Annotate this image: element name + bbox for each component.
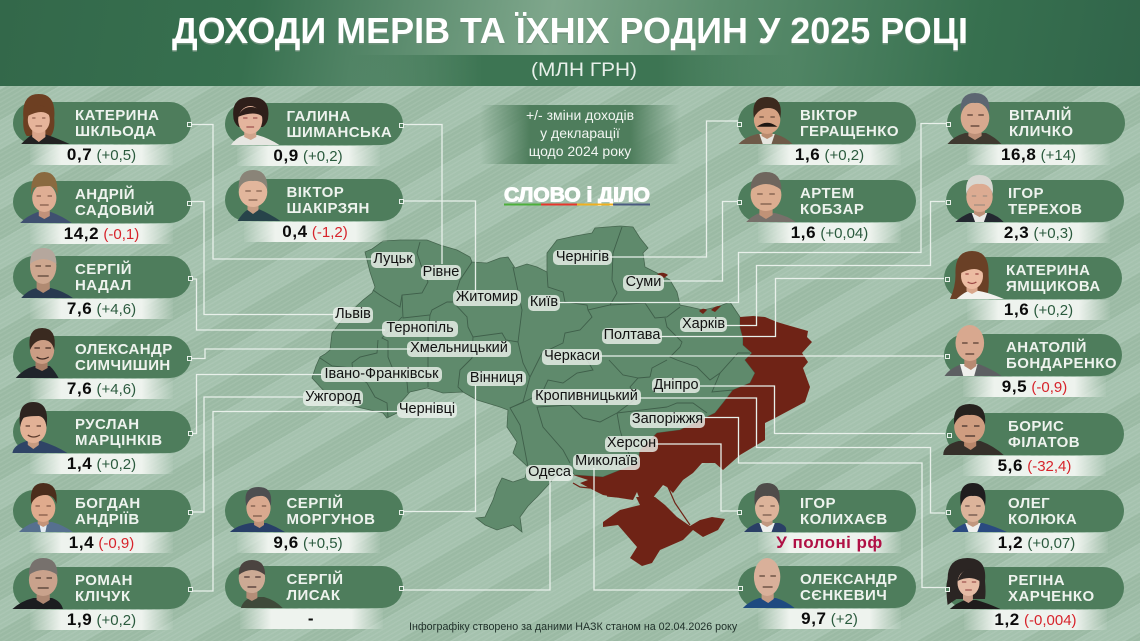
label: Львів: Львів (335, 306, 371, 322)
card: Ігор Терехов: 2,3 (+0,3) (1004, 223, 1073, 242)
label: Херсон: Херсон (607, 435, 656, 451)
oblast borders (320, 227, 750, 467)
card: Регіна Харченко (945, 558, 1124, 630)
card: Сергій Моргунов: СЕРГІЙ (286, 495, 344, 512)
label: Одеса: Одеса (528, 464, 571, 480)
card: Ігор Колихаєв (737, 483, 916, 553)
legend note (480, 105, 680, 164)
legend note: щодо 2024 року (529, 143, 631, 159)
card: Катерина Шкльода: ШКЛЬОДА (75, 123, 156, 140)
card: Ігор Колихаєв: ІГОР (800, 495, 836, 512)
card: Богдан Андріїв: БОГДАН (75, 495, 141, 512)
subtitle band (350, 55, 790, 86)
label: Кропивницький: Кропивницький (535, 388, 638, 404)
card: Віталій Кличко (946, 93, 1125, 165)
label: Черкаси: Черкаси (544, 348, 600, 364)
card: Віталій Кличко: 16,8 (+14) (1001, 145, 1076, 164)
card: Сергій Лисак (225, 560, 404, 629)
card: Богдан Андріїв (13, 483, 193, 553)
card: Сергій Лисак: ЛИСАК (286, 587, 341, 604)
logo: Слово і діло: СЛОВО і ДІЛО (504, 184, 650, 206)
card: Артем Кобзар: 1,6 (+0,04) (791, 223, 868, 242)
card: Олександр Сєнкевич: СЄНКЕВИЧ (800, 587, 887, 604)
card: Олег Колюка: КОЛЮКА (1008, 511, 1077, 528)
card: Віктор Геращенко (737, 97, 916, 165)
label: Запоріжжя: Запоріжжя (632, 411, 703, 427)
card: Олег Колюка (946, 483, 1124, 553)
card: Роман Клічук (12, 558, 193, 630)
card: Віктор Шакірзян: 0,4 (-1,2) (282, 222, 348, 241)
card: Роман Клічук: 1,9 (+0,2) (67, 610, 136, 629)
government-controlled territory (312, 226, 755, 532)
card: Катерина Ямщикова: ЯМЩИКОВА (1006, 278, 1101, 295)
label: Миколаїв: Миколаїв (575, 453, 638, 469)
card: Катерина Шкльода: КАТЕРИНА (75, 107, 159, 124)
footer source note: Інфографіку створено за даними НАЗК станом на 02.04.2026 року (409, 621, 737, 633)
card: Андрій Садовий: 14,2 (-0,1) (64, 224, 139, 243)
label: Хмельницький: Хмельницький (410, 340, 508, 356)
card: Олександр Сєнкевич: ОЛЕКСАНДР (800, 571, 898, 588)
card: Сергій Моргунов: МОРГУНОВ (286, 511, 375, 528)
card: Олег Колюка: ОЛЕГ (1008, 495, 1050, 512)
card: Артем Кобзар (737, 172, 916, 243)
card: Сергій Моргунов (225, 487, 404, 553)
small occupied areas in the north-east (657, 273, 721, 314)
card: Регіна Харченко: ХАРЧЕНКО (1008, 588, 1095, 605)
card: Богдан Андріїв: 1,4 (-0,9) (69, 533, 134, 552)
card: Галина Шиманська: ГАЛИНА (286, 108, 351, 125)
label: Івано-Франківськ: Івано-Франківськ (325, 366, 438, 382)
header band (0, 0, 1140, 86)
card: Борис Філатов (943, 404, 1124, 476)
card: Катерина Ямщикова: КАТЕРИНА (1006, 262, 1090, 279)
card: Сергій Лисак: СЕРГІЙ (286, 571, 344, 588)
card: Віктор Шакірзян: ВІКТОР (286, 184, 344, 201)
card: Віктор Геращенко: 1,6 (+0,2) (795, 145, 864, 164)
card: Руслан Марцінків: РУСЛАН (75, 416, 140, 433)
card: Олександр Симчишин: 7,6 (+4,6) (67, 379, 136, 398)
card: Руслан Марцінків (12, 402, 193, 474)
card: Віктор Шакірзян (225, 170, 404, 242)
label: Дніпро: Дніпро (653, 376, 699, 392)
card: Ігор Колихаєв: У полоні рф (776, 533, 883, 552)
label: Житомир: Житомир (456, 289, 518, 305)
card: Віктор Геращенко: ГЕРАЩЕНКО (800, 123, 899, 140)
card: Ігор Терехов: ІГОР (1008, 185, 1044, 202)
card: Борис Філатов: ФІЛАТОВ (1008, 434, 1080, 451)
card: Сергій Лисак: - (308, 609, 314, 628)
card: Сергій Моргунов: 9,6 (+0,5) (273, 533, 343, 552)
card: Віктор Шакірзян: ШАКІРЗЯН (286, 200, 370, 217)
card: Анатолій Бондаренко: БОНДАРЕНКО (1006, 355, 1117, 372)
card: Анатолій Бондаренко: 9,5 (-0,9) (1002, 377, 1067, 396)
card: Олександр Симчишин: ОЛЕКСАНДР (75, 341, 173, 358)
card: Катерина Ямщикова: 1,6 (+0,2) (1004, 300, 1073, 319)
label: Вінниця: Вінниця (470, 370, 523, 386)
card: Олександр Сєнкевич (738, 558, 916, 629)
card: Артем Кобзар: КОБЗАР (800, 201, 864, 218)
card: Галина Шиманська: ШИМАНСЬКА (286, 124, 392, 141)
card: Регіна Харченко: 1,2 (-0,004) (994, 610, 1077, 629)
card: Сергій Надал: 7,6 (+4,6) (67, 299, 136, 318)
card: Анатолій Бондаренко (944, 325, 1122, 397)
card: Віталій Кличко: ВІТАЛІЙ (1009, 107, 1072, 124)
card: Олег Колюка: 1,2 (+0,07) (998, 533, 1075, 552)
title: (МЛН ГРН) (531, 60, 637, 81)
label: Чернігів: Чернігів (556, 248, 609, 264)
card: Ігор Колихаєв: КОЛИХАЄВ (800, 511, 888, 528)
label: Тернопіль: Тернопіль (386, 320, 454, 336)
label: Луцьк: Луцьк (373, 251, 413, 267)
card: Галина Шиманська: 0,9 (+0,2) (273, 146, 343, 165)
label: Суми: Суми (626, 274, 661, 290)
card: Борис Філатов: 5,6 (-32,4) (998, 456, 1071, 475)
card: Андрій Садовий (13, 172, 192, 244)
title: ДОХОДИ МЕРІВ ТА ЇХНІХ РОДИН У 2025 РОЦІ (172, 12, 968, 52)
card: Олександр Симчишин (13, 328, 192, 399)
label: Ужгород: Ужгород (305, 389, 361, 405)
card: Ігор Терехов: ТЕРЕХОВ (1008, 201, 1082, 218)
card: Катерина Ямщикова (944, 251, 1122, 320)
card: Олександр Сєнкевич: 9,7 (+2) (801, 609, 858, 628)
legend note: +/- зміни доходів (526, 107, 634, 123)
card: Олександр Симчишин: СИМЧИШИН (75, 357, 171, 374)
card: Регіна Харченко: РЕГІНА (1008, 572, 1065, 589)
card: Андрій Садовий: АНДРІЙ (75, 186, 135, 203)
label: Рівне: Рівне (423, 264, 459, 280)
card: Роман Клічук: КЛІЧУК (75, 588, 131, 605)
card: Роман Клічук: РОМАН (75, 572, 133, 589)
legend note: у декларації (540, 125, 620, 141)
card: Віктор Геращенко: ВІКТОР (800, 107, 858, 124)
card: Сергій Надал: СЕРГІЙ (75, 261, 132, 278)
card: Богдан Андріїв: АНДРІЇВ (75, 511, 140, 528)
card: Артем Кобзар: АРТЕМ (800, 185, 855, 202)
card: Анатолій Бондаренко: АНАТОЛІЙ (1006, 339, 1087, 356)
Crimea (603, 497, 725, 566)
card: Галина Шиманська (225, 97, 404, 166)
Arabat spit and coastal spits (573, 483, 690, 525)
title (172, 10, 968, 81)
label: Харків: Харків (682, 316, 725, 332)
occupied territory (573, 316, 812, 500)
card: Ігор Терехов (946, 175, 1124, 243)
card: Борис Філатов: БОРИС (1008, 418, 1064, 435)
card: Катерина Шкльода: 0,7 (+0,5) (67, 145, 136, 164)
title: ДОХОДИ МЕРІВ ТА ЇХНІХ РОДИН У 2025 РОЦІ (172, 10, 968, 51)
card: Віталій Кличко: КЛИЧКО (1009, 123, 1074, 140)
card: Сергій Надал: НАДАЛ (75, 277, 132, 294)
label: Київ: Київ (530, 294, 558, 310)
card: Андрій Садовий: САДОВИЙ (75, 202, 155, 219)
card: Руслан Марцінків: МАРЦІНКІВ (75, 432, 162, 449)
label: Полтава: Полтава (604, 327, 660, 343)
label: Чернівці: Чернівці (399, 401, 455, 417)
city labels (303, 248, 727, 481)
card: Сергій Надал (13, 248, 193, 319)
card: Катерина Шкльода (13, 94, 192, 165)
card: Руслан Марцінків: 1,4 (+0,2) (67, 454, 136, 473)
